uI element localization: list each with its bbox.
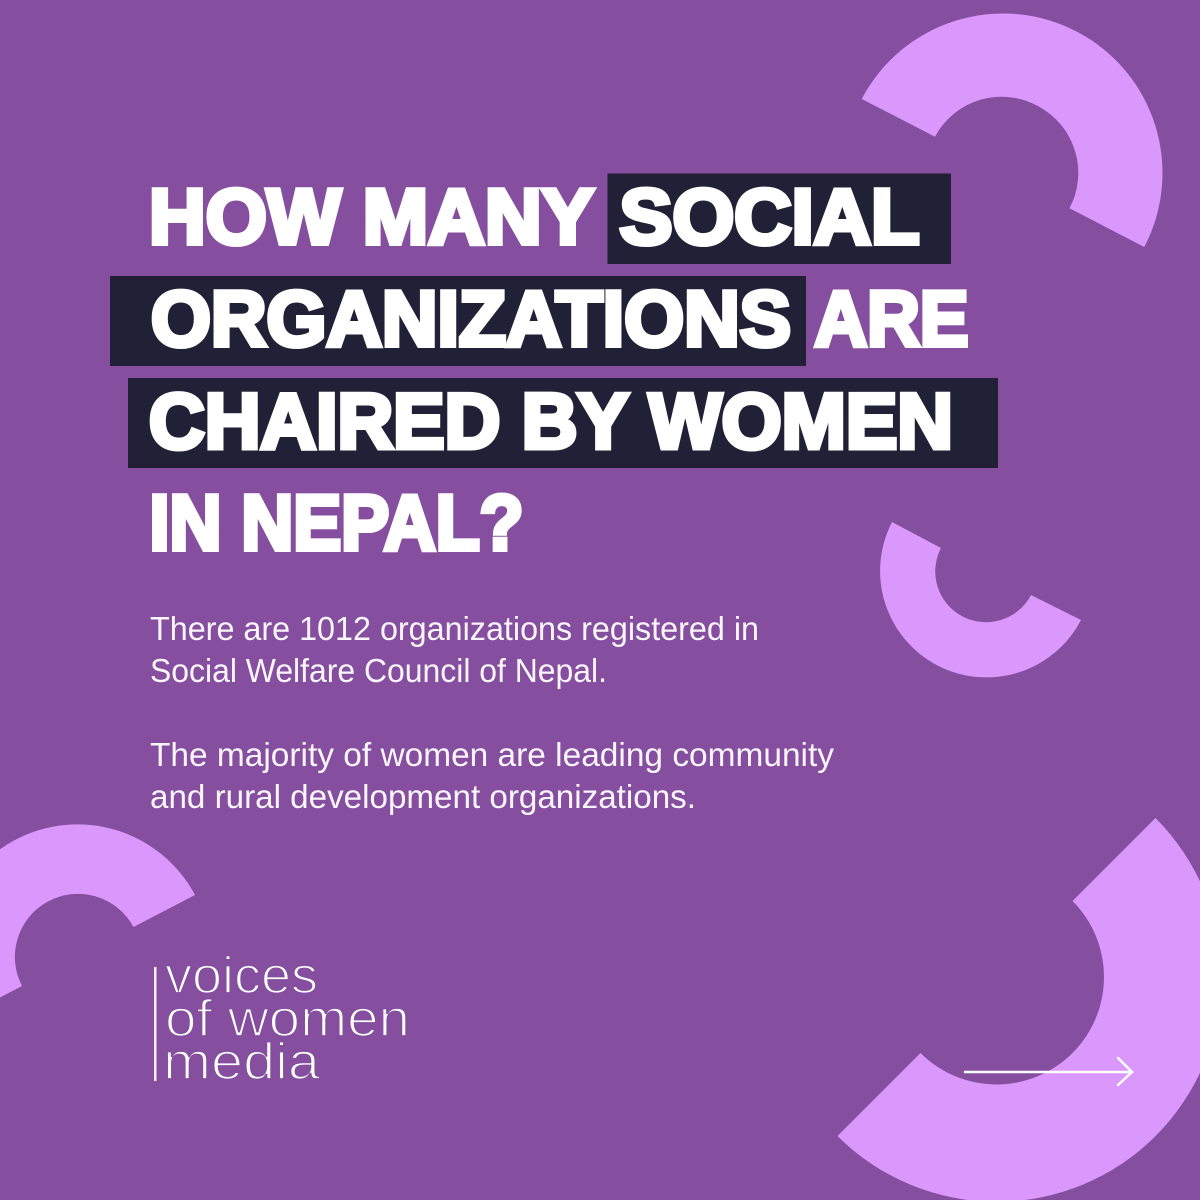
highlight box: organizations: [110, 276, 806, 366]
arc shape: bottom left: [0, 824, 195, 1019]
body text: registered organizations: Social Welfare Council of Nepal.: [150, 652, 607, 689]
title words: chaired by women: CHAIRED BY WOMEN: [149, 377, 953, 465]
logo: voices of women media: [154, 947, 410, 1091]
highlight box: chaired by women: [128, 378, 998, 468]
arc shape: top right: [862, 13, 1163, 247]
arc shape: bottom right: [838, 818, 1200, 1200]
logo: voices of women media: media: [163, 1033, 320, 1091]
title word: social: SOCIAL: [620, 172, 920, 260]
body text: women leading organizations: The majority of women are leading community: [150, 736, 835, 773]
highlight box: social: [608, 174, 951, 264]
body text: registered organizations: There are 1012 organizations registered in: [150, 610, 759, 647]
title: [110, 172, 998, 566]
logo: voices of women media: of women: [165, 990, 410, 1048]
logo: voices of women media: voices: [165, 947, 318, 1005]
title word: organizations: ORGANIZATIONS: [151, 274, 791, 362]
body text: women leading organizations: [150, 736, 835, 815]
title word: are: ARE: [814, 274, 968, 362]
title words: how many: HOW MANY: [149, 172, 594, 260]
arrow: [965, 1058, 1132, 1085]
body text: registered organizations: [150, 610, 759, 689]
body text: women leading organizations: and rural development organizations.: [150, 778, 696, 815]
title words: in nepal: IN NEPAL?: [150, 478, 524, 566]
arc shape: middle right: [880, 522, 1081, 677]
